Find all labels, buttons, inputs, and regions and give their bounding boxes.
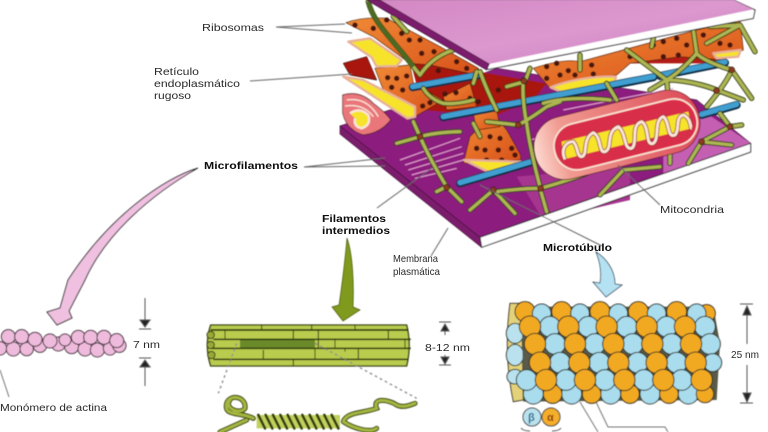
- dimension: 7 nm: [139, 298, 151, 386]
- cell cortex membrane: [367, 0, 755, 70]
- label: reticulo endoplasmatico rugoso: Retículo: [154, 66, 199, 78]
- label: membrana plasmatica: plasmática: [393, 266, 440, 278]
- label: monomero de actina: Monómero de actina: [0, 402, 107, 414]
- label: microtubulo: Microtúbulo: [543, 242, 612, 254]
- dark red endoplasmic backing: [410, 60, 547, 117]
- label: microfilamentos: Microfilamentos: [204, 160, 298, 172]
- microfilaments: [400, 88, 687, 178]
- intermediate filament bundle: [207, 325, 417, 432]
- arrow: blue to microtubule: [593, 252, 622, 297]
- arrow: pink to actin: [47, 168, 198, 325]
- coiled protein: [220, 397, 415, 432]
- plasma membrane: [340, 68, 751, 247]
- tubulin legend: β: [528, 412, 535, 424]
- cisternae yellow: [343, 38, 741, 173]
- ribosomes: [352, 17, 733, 163]
- tubulin legend: [521, 408, 561, 431]
- small mitochondrion: [343, 94, 391, 135]
- label: 25 nm: 25 nm: [731, 349, 759, 361]
- tubulin legend: α: [547, 412, 554, 424]
- intermediate filaments: [368, 2, 755, 213]
- dimension: 8-12 nm: [439, 322, 451, 365]
- label: 8-12 nm: 8-12 nm: [425, 342, 470, 354]
- label: filamentos intermedios: Filamentos: [322, 213, 386, 225]
- microtubule: [506, 302, 722, 404]
- label: filamentos intermedios: intermedios: [322, 225, 390, 237]
- panel: cell section: [340, 0, 755, 247]
- label: ribosomas: Ribosomas: [202, 22, 264, 34]
- mitochondrion: [527, 84, 706, 186]
- label: reticulo endoplasmatico rugoso: rugoso: [154, 90, 191, 102]
- rough endoplasmic reticulum: [346, 18, 743, 163]
- label: reticulo endoplasmatico rugoso: endoplasmático: [154, 78, 240, 90]
- actin microfilament: [0, 330, 126, 357]
- label: reticulo endoplasmatico rugoso: [154, 66, 240, 102]
- label: membrana plasmatica: [393, 253, 440, 278]
- label: 7 nm: 7 nm: [133, 339, 160, 351]
- label: mitocondria: Mitocondria: [660, 204, 724, 216]
- zoom dotted guides: [218, 343, 417, 398]
- dimension: 25 nm: [740, 304, 753, 403]
- label: filamentos intermedios: [322, 213, 390, 237]
- arrow: green to intermediate filament: [332, 238, 360, 321]
- label: membrana plasmatica: Membrana: [393, 253, 438, 265]
- blue microtubules: [413, 62, 737, 183]
